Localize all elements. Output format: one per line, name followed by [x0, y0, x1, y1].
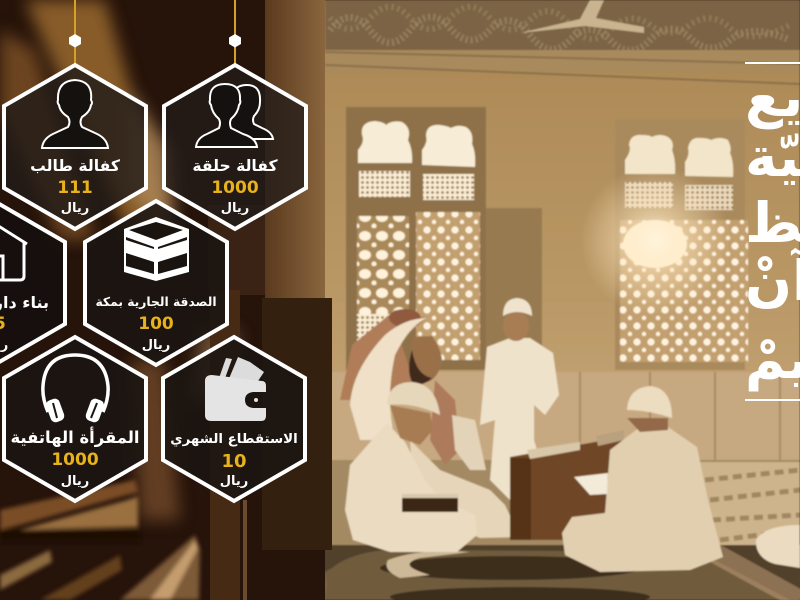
lower wall and skirting [332, 372, 800, 464]
standing boy [480, 298, 559, 500]
icon: kaaba [124, 217, 189, 281]
amount: 111 [57, 178, 93, 198]
currency: ريال [221, 201, 249, 216]
currency: ريال [142, 338, 170, 353]
label: كفالة طالب [30, 157, 121, 175]
background photo: mosque interior [245, 0, 800, 600]
foreground wooden planks [0, 480, 200, 600]
amount: 10 [221, 451, 247, 472]
label: كفالة حلقة [192, 157, 279, 175]
dark left area with wood and light beams [0, 0, 332, 600]
title bottom rule [745, 399, 800, 401]
currency: ريال [220, 474, 248, 489]
label: الصدقة الجارية بمكة [95, 295, 217, 309]
icon: person [42, 80, 108, 148]
label: الاستقطاع الشهري [170, 432, 298, 447]
icon: wallet [205, 357, 266, 421]
card: monthly deduction [163, 337, 305, 501]
title top rule [745, 62, 800, 64]
boy at the right edge [756, 525, 800, 568]
right window [580, 120, 748, 370]
amount: 100 [138, 314, 174, 334]
carpet [245, 460, 800, 600]
card: kafalat talib [4, 65, 146, 229]
calligraphy frieze [325, 0, 800, 84]
boy seated in the foreground left [345, 382, 477, 552]
boy seated in the foreground right [562, 386, 723, 572]
card: telephone recitation [4, 337, 146, 501]
icon: two people [196, 84, 273, 147]
hanging string left [69, 0, 81, 64]
door panel between windows [486, 208, 542, 373]
label: المقرأة الهاتفية [10, 427, 140, 447]
hanging string right [229, 0, 241, 64]
amount: 1000 [51, 450, 99, 470]
currency: ريال [61, 201, 89, 216]
card: kafalat halaqa [164, 65, 306, 229]
ceiling fan [520, 0, 644, 33]
pillar [265, 0, 325, 300]
amount: 1000 [211, 178, 259, 198]
currency: ريال [61, 474, 89, 489]
man with ghutra [340, 309, 520, 538]
card: sadaqa jariya in Makkah [85, 201, 227, 365]
reading desk with books [510, 430, 624, 540]
icon: headphones [43, 355, 108, 424]
icon: house [0, 222, 27, 280]
dark column [262, 298, 332, 550]
left window [346, 107, 486, 370]
card: bina dar [0, 201, 65, 365]
